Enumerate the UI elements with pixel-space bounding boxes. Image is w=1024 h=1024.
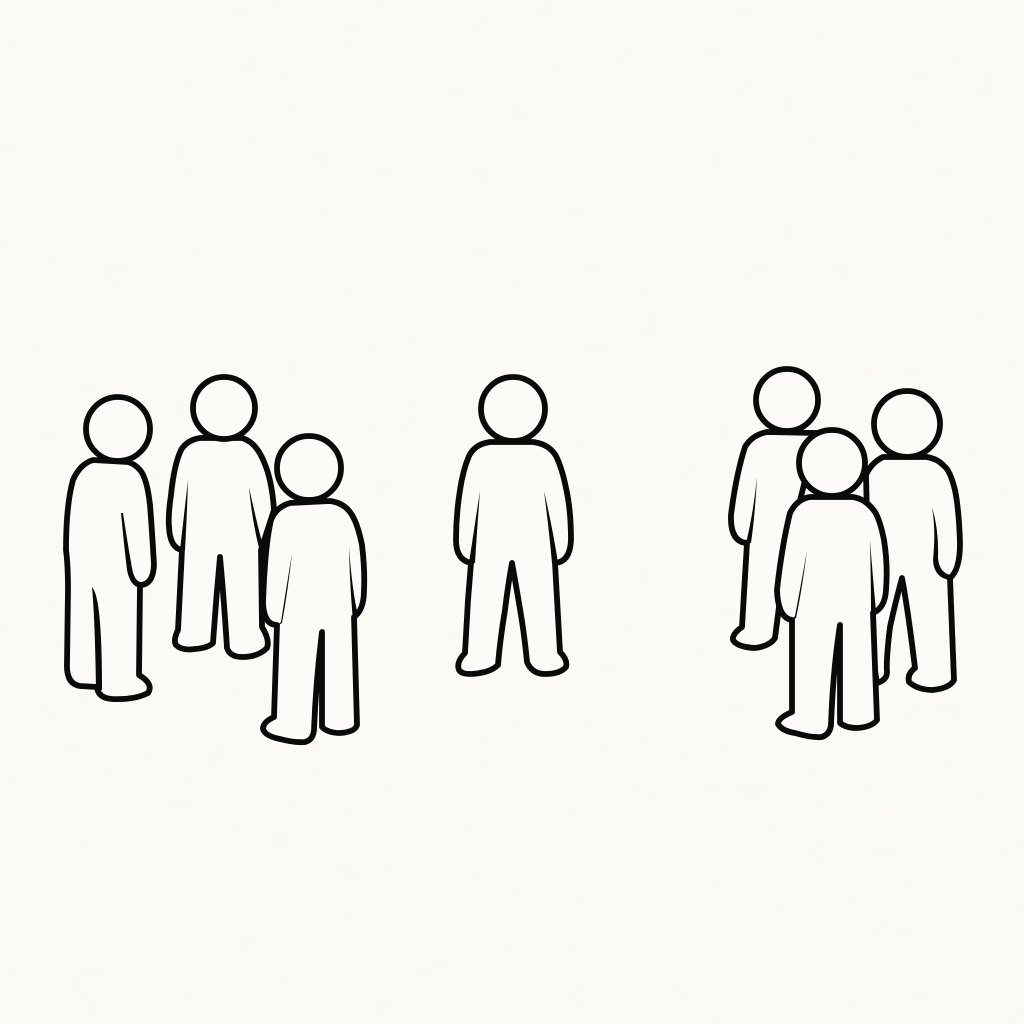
- right group of three people: [731, 369, 960, 737]
- left group of three people: [66, 377, 364, 742]
- person: right group, front centre: [777, 430, 887, 737]
- person: left group, far left: [66, 397, 154, 699]
- person: right group, back right: [866, 391, 960, 690]
- person: centre, standing alone: [456, 377, 571, 674]
- person: right group, back left: [731, 369, 818, 648]
- person: left group, back centre: [169, 377, 274, 657]
- person: left group, front right: [263, 436, 364, 742]
